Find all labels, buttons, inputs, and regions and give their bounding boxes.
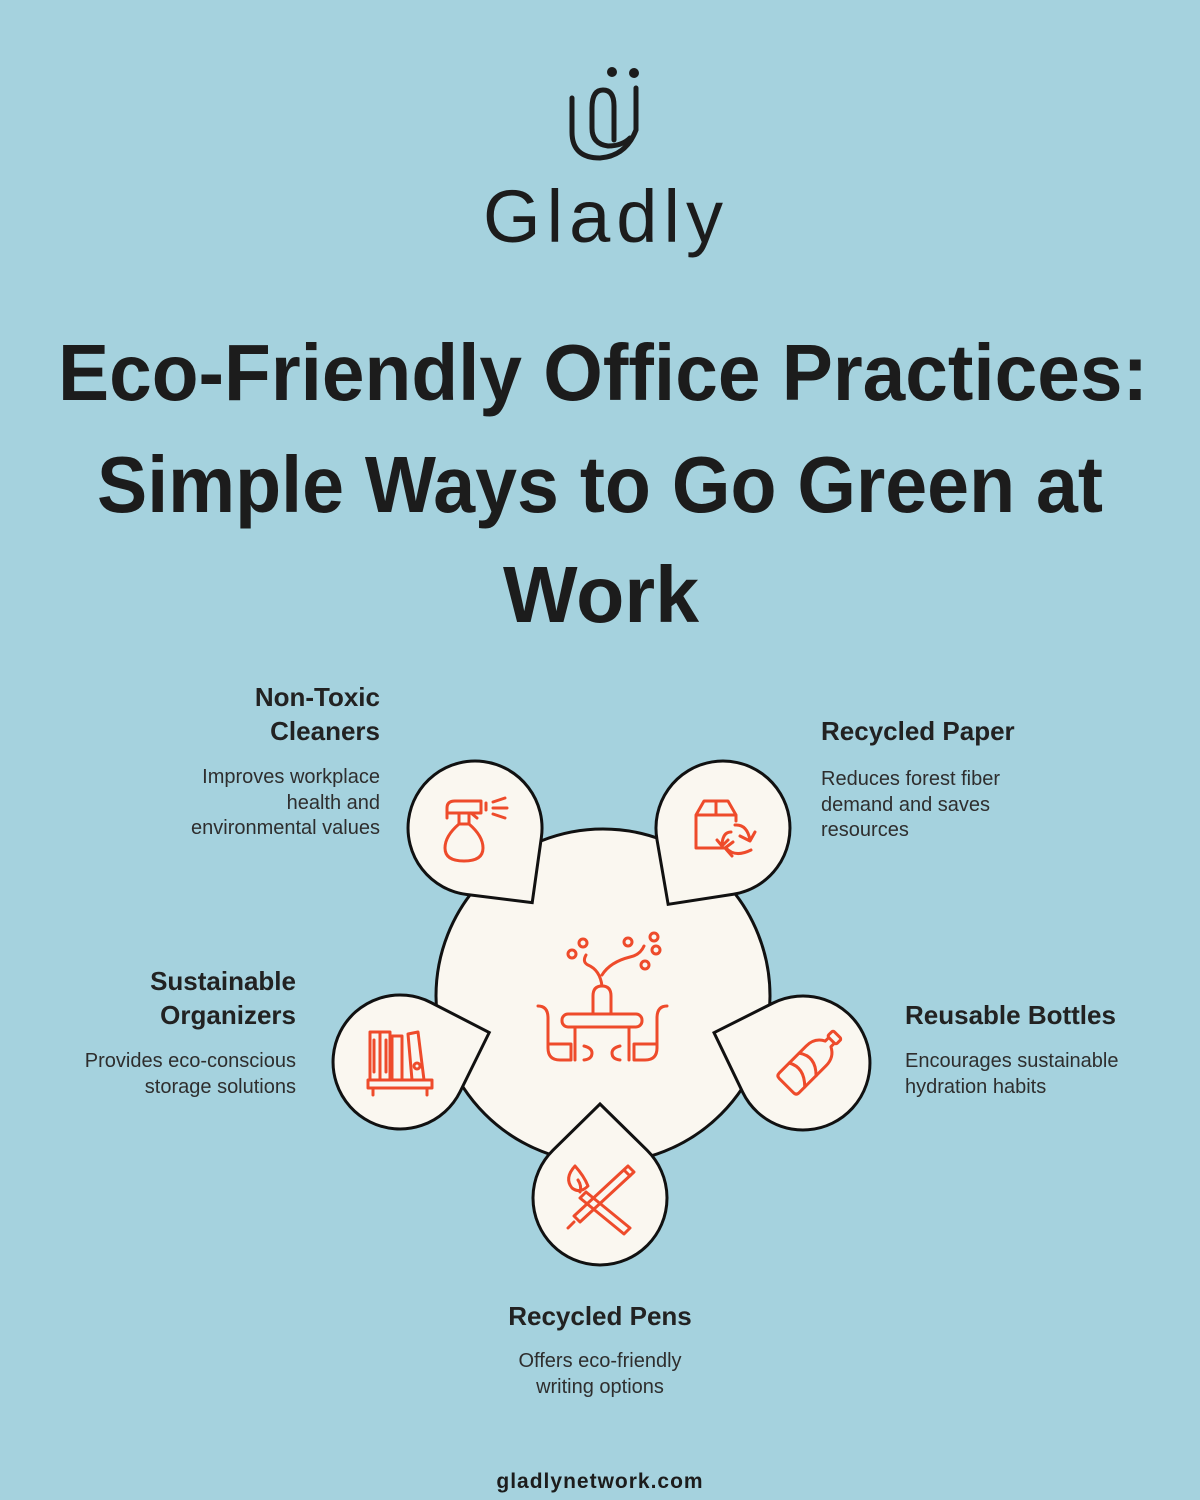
text: recycled paper: demand and saves xyxy=(821,794,990,816)
text: recycled paper xyxy=(821,716,1015,841)
text: sustainable organizers xyxy=(85,966,296,1098)
petal: sustainable organizers xyxy=(315,969,510,1147)
text: sustainable organizers: Provides eco-conscious xyxy=(85,1050,296,1072)
logo and title graphic xyxy=(58,67,1148,639)
title: Simple Ways to Go Green at xyxy=(97,440,1103,529)
text: non-toxic cleaners xyxy=(191,682,380,839)
text: sustainable organizers: storage solutions xyxy=(145,1076,296,1098)
text: reusable bottles: hydration habits xyxy=(905,1076,1046,1098)
text: reusable bottles: Encourages sustainable xyxy=(905,1050,1118,1072)
title: Eco-Friendly Office Practices: xyxy=(58,328,1148,417)
text: non-toxic cleaners: environmental values xyxy=(191,817,380,839)
petal: recycled paper xyxy=(614,735,816,943)
text: recycled paper: resources xyxy=(821,819,909,841)
footer url: gladlynetwork.com xyxy=(496,1470,704,1493)
petal: non-toxic cleaners xyxy=(381,734,585,943)
text: non-toxic cleaners: health and xyxy=(287,792,380,814)
text: sustainable organizers: Organizers xyxy=(160,1000,296,1030)
text: recycled pens: Offers eco-friendly xyxy=(518,1350,682,1372)
text: non-toxic cleaners: Cleaners xyxy=(270,716,380,746)
text: non-toxic cleaners: Non-Toxic xyxy=(255,682,380,712)
title xyxy=(58,328,1148,639)
icon: desk with plant xyxy=(538,933,667,1060)
title: Work xyxy=(503,550,699,639)
central circle xyxy=(436,829,770,1163)
text: reusable bottles: Reusable Bottles xyxy=(905,1000,1116,1030)
logo icon xyxy=(572,70,636,158)
petal: recycled pens xyxy=(533,1104,667,1265)
text: recycled pens: Recycled Pens xyxy=(508,1301,692,1331)
text: recycled pens xyxy=(508,1301,692,1398)
text: recycled paper: Reduces forest fiber xyxy=(821,768,1000,790)
text: reusable bottles xyxy=(905,1000,1118,1098)
text: recycled paper: Recycled Paper xyxy=(821,716,1015,746)
text: recycled pens: writing options xyxy=(536,1376,664,1398)
text: non-toxic cleaners: Improves workplace xyxy=(202,766,380,788)
text: sustainable organizers: Sustainable xyxy=(150,966,296,996)
petal: reusable bottles xyxy=(692,969,888,1148)
wordmark: Gladly xyxy=(483,175,723,258)
